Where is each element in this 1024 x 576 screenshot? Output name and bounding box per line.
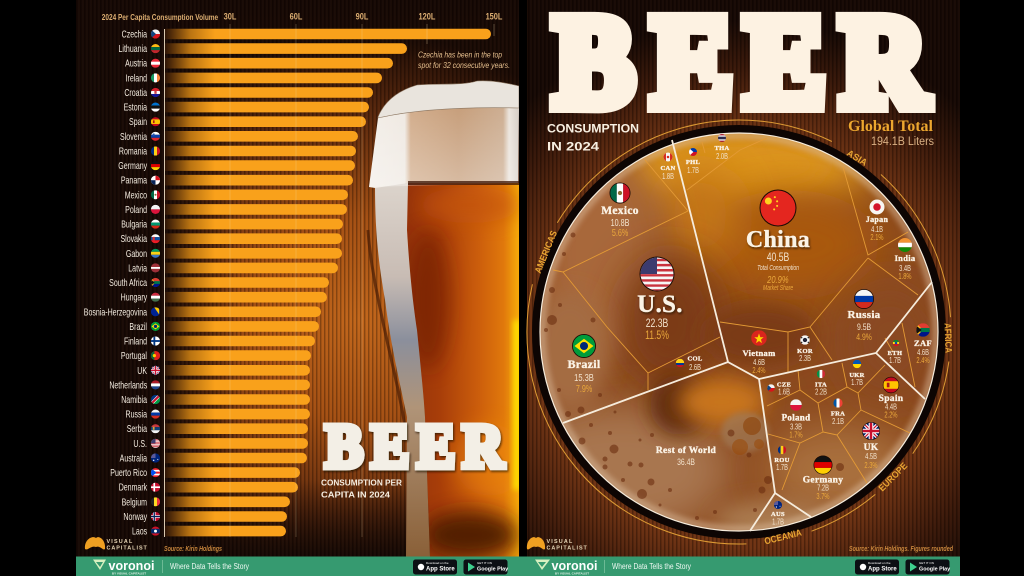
country: Colombia <box>676 356 703 372</box>
country: UK <box>862 422 880 470</box>
country: South Africa: 4.6B <box>917 349 929 357</box>
country: Ethiopia: ETH <box>888 350 902 357</box>
region labels: AFRICA <box>941 323 954 353</box>
subtitle: consumption per capita: CAPITA IN 2024 <box>321 490 390 500</box>
country labels: Poland <box>125 204 147 215</box>
country labels: U.S. <box>133 438 147 449</box>
white region dividers <box>563 140 932 531</box>
gold outer arcs <box>527 120 950 544</box>
country labels <box>84 28 148 537</box>
country labels: Belgium <box>122 496 147 508</box>
footer left: app badges: Download on the <box>426 561 449 565</box>
country: Colombia: COL <box>688 356 703 362</box>
country: Ukraine: 1.7B <box>851 379 863 387</box>
country flags <box>151 29 160 536</box>
footer right: voronoi <box>535 559 691 576</box>
country: South Africa <box>914 323 932 365</box>
country labels: Mexico <box>125 189 147 201</box>
country: India: 1.8% <box>898 273 912 281</box>
country: U.S.: 22.3B <box>646 318 668 330</box>
source left: Source: Kirin Holdings <box>164 544 222 553</box>
country: U.S.: 11.5% <box>645 330 669 342</box>
country labels: Romania <box>119 145 147 157</box>
country: Germany <box>803 456 843 501</box>
axis header: 60L <box>290 11 302 22</box>
country: Spain: Spain <box>879 394 904 404</box>
country: Mexico: Mexico <box>601 205 639 217</box>
country: Poland <box>782 399 810 440</box>
country labels: Bosnia-Herzegovina <box>84 306 147 318</box>
source right: Source: Kirin Holdings. Figures rounded <box>849 544 953 553</box>
country labels: Australia <box>120 452 147 464</box>
axis header: 30L <box>224 11 236 22</box>
wood background right <box>527 0 960 557</box>
logo: Visual Capitalist right <box>527 537 588 552</box>
footer right: app badges: Google Play <box>919 566 950 572</box>
logo: Visual Capitalist right: VISUAL <box>546 539 573 545</box>
country: Brazil: 7.9% <box>576 383 592 394</box>
region labels: ASIA <box>844 148 869 169</box>
country: Australia <box>771 501 785 527</box>
logo: Visual Capitalist: CAPITALIST <box>106 546 148 552</box>
country: U.S.: U.S. <box>637 291 683 318</box>
footer right: app badges: Download on the <box>868 561 891 565</box>
region labels: EUROPE <box>877 461 910 494</box>
axis header: 150L <box>486 11 502 22</box>
Rest of World: Rest of World <box>656 446 717 456</box>
country: Czechia: 1.6B <box>778 389 790 397</box>
footer right: app badges: GET IT ON <box>919 561 934 565</box>
country: Philippines: PHL <box>686 159 700 166</box>
footer right: voronoi: voronoi <box>552 559 598 573</box>
country labels: Spain <box>129 116 147 128</box>
country: Poland: 3.3B <box>790 424 802 432</box>
country: Thailand <box>714 134 730 161</box>
country: Russia <box>848 289 881 342</box>
country: UK: UK <box>864 443 879 453</box>
Rest of World: 36.4B <box>677 457 695 467</box>
country: Czechia: CZE <box>777 382 791 388</box>
country: Ukraine <box>849 360 865 387</box>
country: Canada <box>661 152 675 181</box>
country: China: China <box>746 227 810 253</box>
country: Colombia: 2.6B <box>689 364 701 372</box>
country labels: Slovakia <box>120 233 147 245</box>
country: Italy <box>815 370 827 397</box>
country: Spain: 4.4B <box>885 404 897 412</box>
country labels: Brazil <box>129 321 147 332</box>
country: Thailand: 2.0B <box>716 153 728 161</box>
footer left: voronoi: Where Data Tells the Story <box>170 562 249 571</box>
footer left: app badges <box>413 560 508 574</box>
country: Japan: Japan <box>866 215 888 224</box>
country: Brazil: Brazil <box>567 357 601 371</box>
bubbles <box>544 232 844 520</box>
country: France: 2.1B <box>832 418 844 426</box>
country: India: India <box>895 253 916 263</box>
country: South Korea: 2.3B <box>799 355 811 363</box>
country: Romania: ROU <box>774 457 790 464</box>
axis header: 90L <box>356 11 368 22</box>
white rim <box>540 133 938 531</box>
country: Vietnam: Vietnam <box>743 348 775 358</box>
beer glass photo <box>368 81 526 559</box>
country: Mexico: 5.6% <box>612 227 628 238</box>
region labels: OCEANIA <box>763 528 803 547</box>
country labels: Puerto Rico <box>110 467 147 478</box>
country labels: Slovenia <box>120 130 147 142</box>
country: China: 40.5B <box>767 252 789 264</box>
country: Canada: CAN <box>661 165 675 172</box>
country labels: Namibia <box>121 394 147 405</box>
country labels: Russia <box>126 408 147 420</box>
axis header: 2024 Per Capita Consumption Volume <box>102 12 218 22</box>
country: Japan <box>866 200 888 242</box>
country: Vietnam: 4.6B <box>753 359 765 367</box>
country labels: Portugal <box>121 350 147 361</box>
subtitle: consumption per capita: CONSUMPTION PER <box>321 478 402 488</box>
country labels: Latvia <box>128 262 147 274</box>
country: South Africa: ZAF <box>914 338 932 348</box>
axis header <box>102 13 502 22</box>
beer top circle <box>540 134 938 530</box>
footer right: app badges <box>855 560 950 574</box>
country: Poland: 1.7% <box>789 432 803 440</box>
footer bar <box>76 556 960 576</box>
country: UK: 4.5B <box>865 453 877 461</box>
country: India: 3.4B <box>899 265 911 273</box>
country: Canada: 1.8B <box>662 173 674 181</box>
country: Ukraine: UKR <box>849 372 865 379</box>
country labels: Laos <box>132 525 148 537</box>
subtitle: consumption per capita <box>321 480 402 498</box>
country: Romania <box>774 446 790 472</box>
country: Thailand: THA <box>714 145 730 152</box>
country: Russia: 4.9% <box>856 332 872 342</box>
footer right: voronoi: Where Data Tells the Story <box>612 562 691 571</box>
gold region dividers <box>553 138 918 490</box>
country labels: Netherlands <box>109 379 148 391</box>
country: Poland: Poland <box>782 412 810 422</box>
logo: Visual Capitalist <box>84 537 147 550</box>
country: South Korea <box>797 335 813 363</box>
country: Ethiopia <box>888 340 902 365</box>
country: Romania: 1.7B <box>776 464 788 472</box>
country: China: Total Consumption <box>757 264 799 272</box>
country: Mexico: 10.8B <box>611 217 630 228</box>
country labels: UK <box>137 364 147 376</box>
country labels: Norway <box>123 511 148 522</box>
country: India <box>895 238 916 281</box>
region labels: AMERICAS <box>533 229 560 275</box>
country: Australia: 1.7B <box>772 519 784 527</box>
logo: Visual Capitalist: VISUAL <box>106 539 133 545</box>
bar chart <box>155 24 494 537</box>
country: Spain: 2.2% <box>884 412 898 420</box>
country: Ethiopia: 1.7B <box>889 357 901 365</box>
subtitle: consumption in 2024: IN 2024 <box>547 140 599 154</box>
country: Vietnam: 2.4% <box>752 367 766 375</box>
country labels: Denmark <box>119 481 148 493</box>
callout: Czechia note: spot for 32 consecutive years. <box>418 61 510 70</box>
callout: global total: Global Total <box>848 118 934 135</box>
country labels: Panama <box>121 174 147 186</box>
footer left: app badges: GET IT ON <box>477 561 492 565</box>
panel: total consumption <box>510 0 960 557</box>
country labels: Bulgaria <box>121 218 147 230</box>
country: Spain <box>879 377 904 420</box>
country labels: Germany <box>118 160 148 171</box>
country: Russia: 9.5B <box>857 322 871 332</box>
country: Mexico <box>601 182 639 238</box>
Rest of World <box>656 446 717 467</box>
subtitle: consumption in 2024 <box>547 122 639 154</box>
black ring <box>532 125 946 539</box>
country: South Africa: 2.4% <box>916 357 930 365</box>
country: China <box>746 190 810 292</box>
country labels: Austria <box>125 57 147 69</box>
country: Germany: 3.7% <box>816 493 830 501</box>
country: Japan: 2.1% <box>870 234 884 242</box>
country labels: Finland <box>124 335 147 347</box>
country: Philippines: 1.7B <box>687 167 699 175</box>
footer left: app badges: Google Play <box>477 566 508 572</box>
country labels: Ireland <box>126 72 147 84</box>
country: Japan: 4.1B <box>871 226 883 234</box>
country labels: Serbia <box>127 423 147 435</box>
region labels <box>533 148 954 547</box>
country: Italy: ITA <box>815 382 827 388</box>
country: Australia: AUS <box>771 511 785 518</box>
country labels: Estonia <box>124 101 147 113</box>
callout: global total <box>848 118 934 148</box>
callout: Czechia note <box>418 50 510 70</box>
country: Germany: 7.2B <box>817 485 829 493</box>
country: UK: 2.3% <box>864 462 878 470</box>
country: Vietnam <box>743 330 775 375</box>
footer left: voronoi <box>93 559 249 576</box>
country: Russia: Russia <box>848 309 881 321</box>
footer left: voronoi: BY VISUAL CAPITALIST <box>112 572 146 576</box>
country: Philippines <box>686 148 700 175</box>
country labels: South Africa <box>109 277 147 288</box>
footer right: voronoi: BY VISUAL CAPITALIST <box>555 572 589 576</box>
country: U.S. <box>637 256 683 342</box>
footer right: app badges: App Store <box>868 566 897 572</box>
wood background left <box>76 0 519 557</box>
country labels: Croatia <box>124 87 147 98</box>
country: China: 20.9% <box>766 274 789 285</box>
panel: per capita consumption <box>76 0 526 559</box>
country: Czechia <box>767 382 791 397</box>
country labels: Czechia <box>122 28 147 40</box>
title: small BEER: BEER <box>325 412 505 481</box>
country labels: Gabon <box>126 247 147 259</box>
country labels: Hungary <box>121 291 148 303</box>
country: Italy: 2.2B <box>815 389 827 397</box>
callout: global total: 194.1B Liters <box>871 136 934 148</box>
country: Brazil <box>567 334 601 394</box>
footer left: voronoi: voronoi <box>108 559 154 573</box>
country labels: Lithuania <box>119 43 147 54</box>
footer left: app badges: App Store <box>426 566 455 572</box>
country: Brazil: 15.3B <box>574 372 594 383</box>
callout: Czechia note: Czechia has been in the top <box>418 50 502 60</box>
logo: Visual Capitalist right: CAPITALIST <box>546 546 588 552</box>
subtitle: consumption in 2024: CONSUMPTION <box>547 122 639 136</box>
country: Germany: Germany <box>803 476 843 486</box>
country: France <box>831 398 845 426</box>
country: China: Market Share <box>763 284 794 292</box>
axis header: 120L <box>419 11 435 22</box>
country: France: FRA <box>831 410 845 418</box>
country: South Korea: KOR <box>797 348 813 355</box>
